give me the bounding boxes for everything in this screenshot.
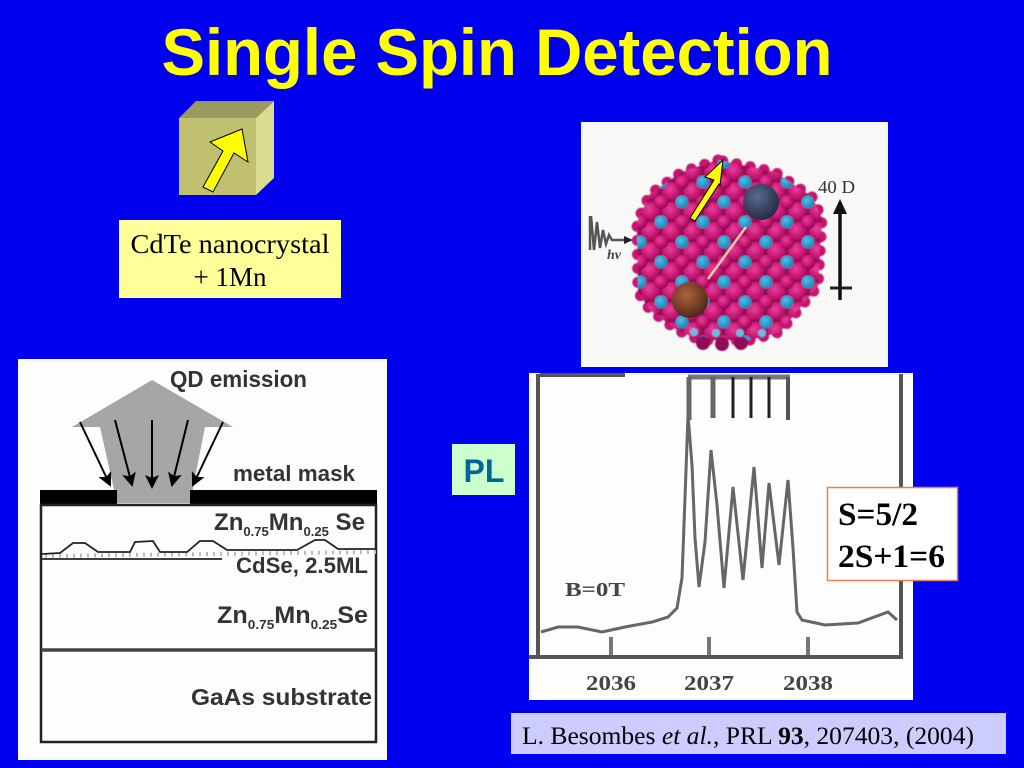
panel: nanocrystal atomic model (581, 122, 888, 367)
spectrum labels: 2037 (684, 671, 734, 695)
panel: QD sample structure diagram (18, 359, 387, 760)
structure labels (170, 366, 372, 710)
emission arrows (80, 420, 223, 487)
atom cluster (637, 160, 822, 351)
label: PL: PL (464, 453, 504, 489)
structure labels: Se (337, 602, 368, 629)
label: CdTe nanocrystal + 1Mn: + 1Mn (194, 262, 267, 292)
structure labels: 0.75 (243, 524, 269, 539)
metal mask (40, 490, 377, 505)
40 D scale arrow: 40 D (818, 177, 855, 197)
structure labels: 0.25 (304, 524, 329, 539)
40 D scale arrow (818, 177, 855, 300)
emission cone (72, 380, 233, 503)
structure labels: CdSe, 2.5ML (236, 553, 368, 578)
spectrum labels (565, 579, 833, 695)
spectrum trace (541, 415, 897, 632)
structure labels: Mn (274, 602, 311, 629)
yellow spin arrow (690, 160, 723, 221)
six-line comb (688, 377, 790, 420)
title: Single Spin Detection (162, 15, 832, 89)
quantum dot layer (42, 540, 376, 559)
axis ticks (611, 637, 808, 655)
structure labels: 0.75 (248, 617, 274, 632)
layer box (41, 505, 376, 742)
brown atom (672, 282, 708, 318)
structure labels: 0.25 (311, 617, 337, 632)
structure labels: metal mask (233, 461, 356, 486)
spectrum labels: 2038 (783, 671, 833, 695)
light pulse hv: hv (607, 248, 622, 263)
light pulse hv (590, 216, 633, 263)
dark Mn atom (743, 184, 779, 220)
callout: spin multiplicity: S=5/2 (838, 497, 918, 533)
label: CdTe nanocrystal + 1Mn: CdTe nanocrystal (130, 229, 330, 259)
spectrum labels: B=0T (565, 579, 626, 601)
callout: spin multiplicity: 2S+1=6 (838, 539, 945, 575)
citation (511, 713, 1006, 754)
spectrum axes (529, 374, 903, 657)
callout: spin multiplicity (828, 488, 958, 580)
spectrum labels: 2036 (586, 671, 636, 695)
structure labels: Se (329, 509, 365, 536)
structure labels: Mn (269, 509, 304, 536)
structure labels: QD emission (170, 366, 307, 392)
label: CdTe nanocrystal + 1Mn (119, 220, 341, 298)
label: PL (452, 444, 515, 495)
citation: L. Besombes et al., PRL 93, 207403, (2004) (522, 723, 974, 750)
panel: PL spectrum (529, 373, 913, 700)
exciton link line (708, 227, 746, 279)
structure labels: GaAs substrate (191, 684, 372, 710)
structure labels: Zn (214, 509, 243, 536)
structure labels: Zn (217, 602, 246, 629)
icon: nanocrystal cube with spin arrow (179, 101, 274, 195)
